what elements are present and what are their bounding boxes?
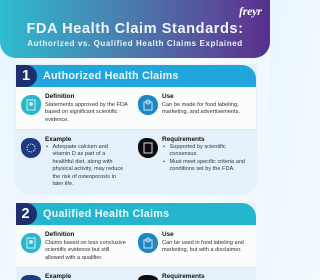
bullet text: healthful diet, along with [52,159,113,165]
bullet text: physical activity, may reduce [52,166,123,172]
heading: Example [45,273,71,280]
title: FDA Health Claim Standards: [26,21,244,37]
block: example [21,273,72,280]
text: marketing, and advertisements. [162,109,240,115]
block: use [138,231,244,253]
block: requirements [138,273,205,280]
heading: Definition [45,93,74,100]
section header band [16,203,256,225]
bullet text: • [46,144,48,150]
panel: authorized health claims [16,65,256,194]
bullet text: Adequate calcium and [52,144,108,150]
icon: example [21,138,41,158]
text: Claims based on less conclusive [45,240,126,246]
white row [16,87,256,130]
logo: freyr [239,4,262,18]
icon: requirements [138,138,158,158]
icon: use [138,95,158,115]
text: evidence. [45,116,69,122]
bullet text: vitamin D as part of a [52,151,105,157]
bullet text [46,144,123,187]
panel: qualified health claims [16,203,256,280]
text: Can be used in food labeling and [162,240,244,246]
block: example [21,136,123,187]
section header band [16,65,256,87]
number badge: 2 [22,206,30,222]
text: allowed with a qualifier. [45,254,103,260]
text [162,102,240,115]
bullet text [163,144,245,172]
text: marketing, but with a disclaimer. [162,247,242,253]
heading: Requirements [162,273,205,280]
subtitle: Authorized vs. Qualified Health Claims Explained [27,39,243,48]
header banner [0,0,270,58]
heading: Example [45,136,71,143]
icon: requirements [138,275,158,280]
block: definition [21,231,126,260]
number badge [16,65,37,87]
heading: Requirements [162,136,205,143]
bullet text: later life. [52,181,74,187]
block: definition [21,93,128,122]
bullet text: Must meet specific criteria and [170,159,245,165]
section heading: Authorized Health Claims [43,70,179,82]
icon: use [138,233,158,253]
icon: definition [21,95,41,115]
bullet text: consensus. [170,151,198,157]
heading: Use [162,93,174,100]
text: scientific evidence but still [45,247,109,253]
icon: example [21,275,41,280]
bullet text: conditions set by the FDA. [170,166,235,172]
block: requirements [138,136,245,172]
number badge [16,203,37,225]
text [45,240,126,260]
text [45,102,128,122]
bullet text: Supported by scientific [170,144,226,150]
heading: Use [162,231,174,238]
block: use [138,93,240,115]
text: based on significant scientific [45,109,117,115]
text: Statements approved by the FDA [45,102,128,108]
section heading: Qualified Health Claims [43,208,169,220]
icon: definition [21,233,41,253]
white row [16,225,256,268]
number badge: 1 [22,68,30,84]
bullet text: • [163,159,165,165]
text [162,240,244,253]
heading: Definition [45,231,74,238]
bullet text: • [163,144,165,150]
text: Can be made for food labeling, [162,102,238,108]
bullet text: the risk of osteoporosis in [52,174,116,180]
